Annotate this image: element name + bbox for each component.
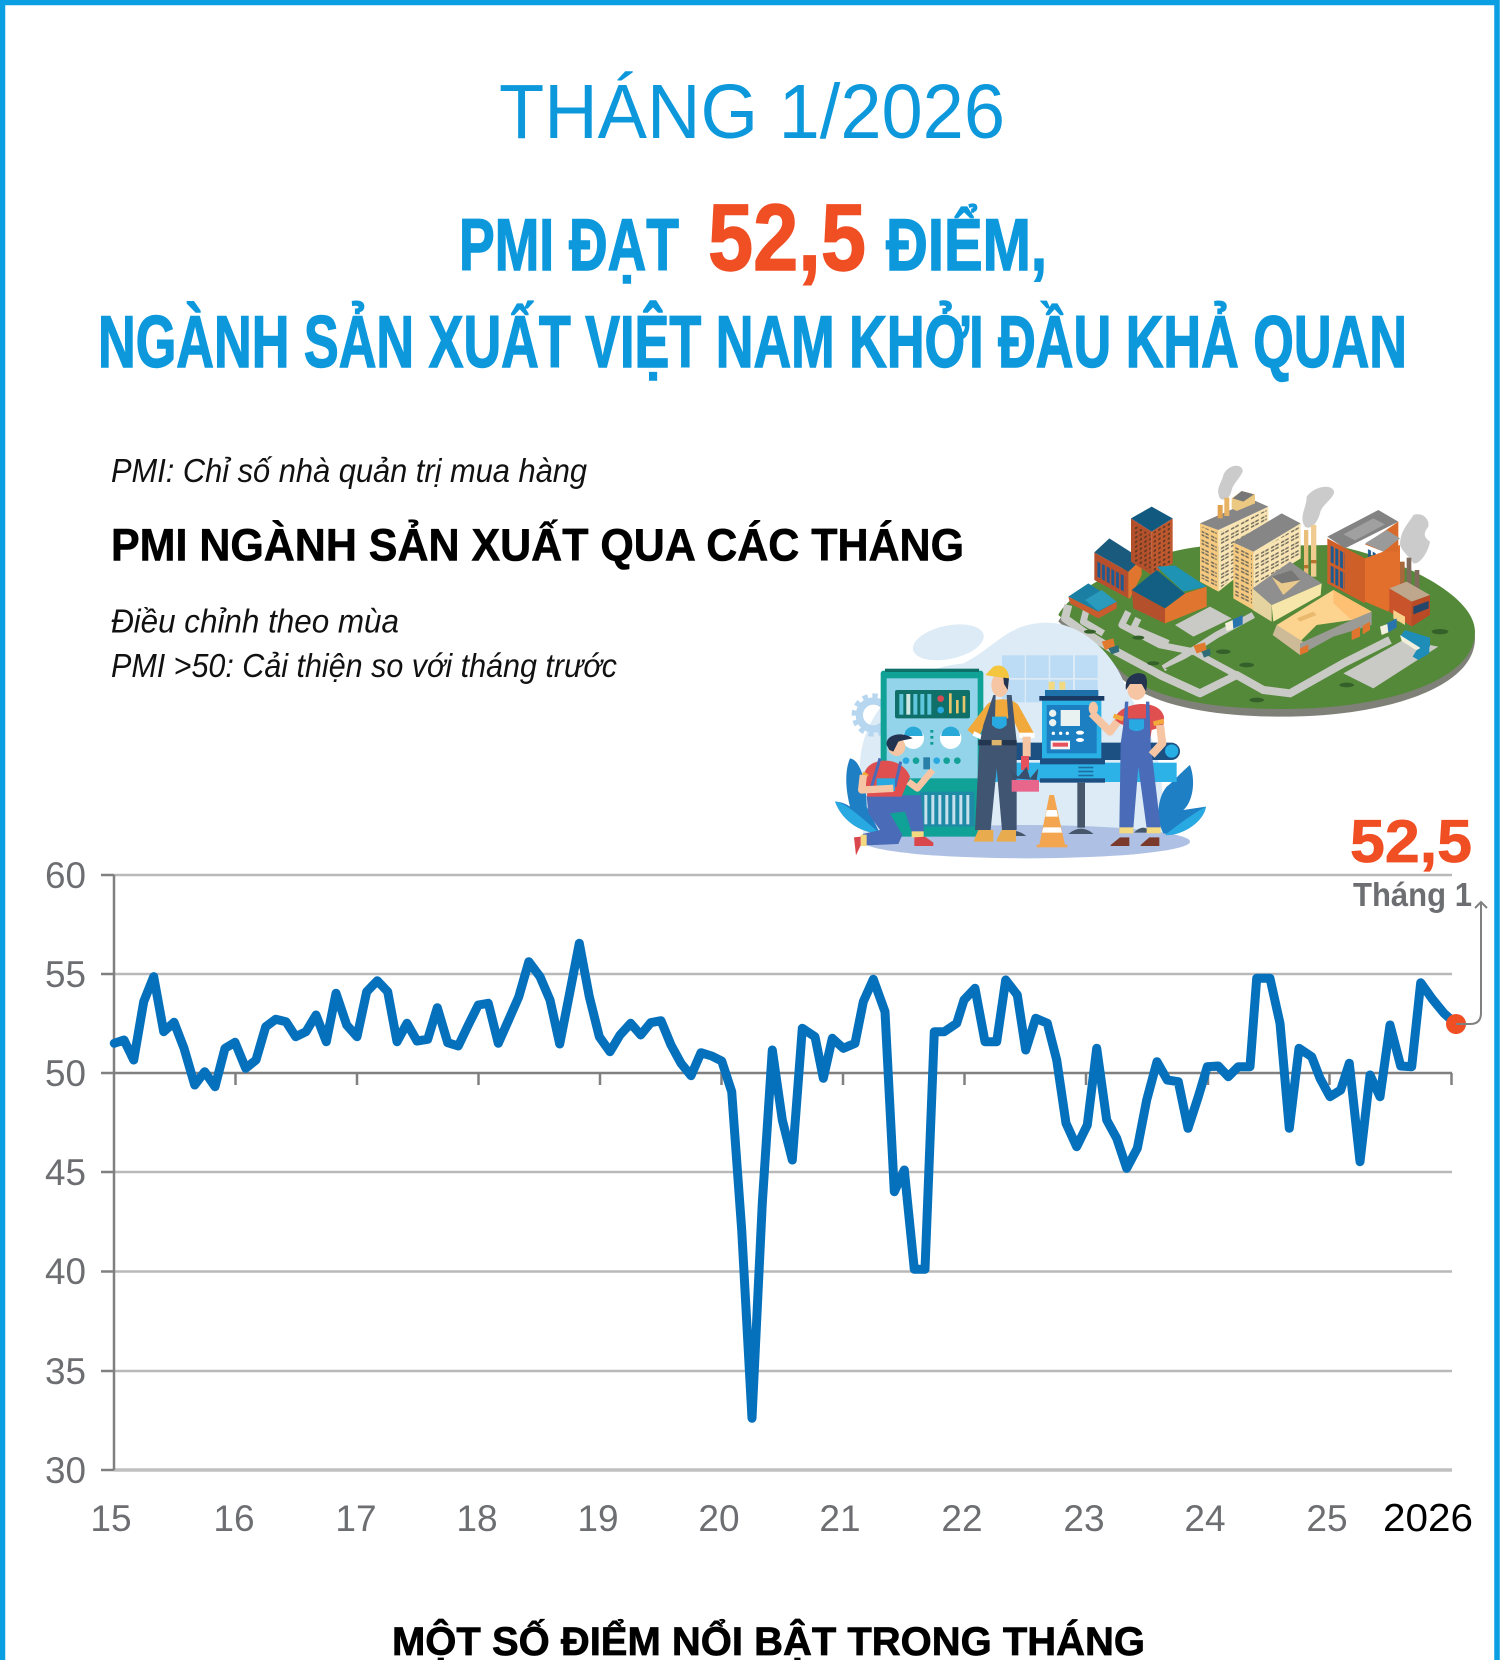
x-axis year labels xyxy=(90,1497,1473,1540)
headline xyxy=(98,185,1407,383)
floor ellipse xyxy=(863,825,1190,858)
large teal-roof hall xyxy=(1157,566,1207,592)
left brick block xyxy=(1094,552,1128,598)
y-axis labels: 40 xyxy=(45,1251,86,1292)
latest value marker xyxy=(1446,1014,1466,1034)
y-axis labels: 45 xyxy=(45,1152,86,1193)
roads xyxy=(1065,605,1390,693)
illustration: industrial park island xyxy=(1058,466,1475,717)
conveyor and stand xyxy=(990,743,1180,836)
x-axis year labels: 19 xyxy=(577,1498,619,1539)
x-axis year labels: 25 xyxy=(1306,1498,1348,1539)
console xyxy=(1039,682,1105,776)
x-axis year labels: 21 xyxy=(819,1498,861,1539)
road-side trees xyxy=(1084,629,1448,702)
main yellow hall xyxy=(1277,590,1372,642)
left leaves xyxy=(835,758,880,833)
grid lines xyxy=(114,875,1452,1470)
x-axis year labels: 15 xyxy=(90,1498,132,1539)
y-axis labels: 30 xyxy=(45,1450,86,1491)
x-axis year labels: 2026 xyxy=(1383,1497,1473,1540)
right leaves xyxy=(1159,765,1206,835)
callout arrow xyxy=(1456,902,1487,1024)
tall brick tower xyxy=(1131,518,1152,575)
x-axis year labels: 22 xyxy=(941,1498,983,1539)
x-axis year labels: 16 xyxy=(213,1498,255,1539)
x-axis year labels: 20 xyxy=(698,1498,740,1539)
worker right, waving xyxy=(1089,673,1164,846)
title: month: THÁNG 1/2026 xyxy=(499,69,1005,155)
y-axis labels: 55 xyxy=(45,954,86,995)
x-axis year labels: 18 xyxy=(456,1498,498,1539)
small teal halls xyxy=(1068,597,1117,618)
PMI definition note: PMI: Chỉ số nhà quản trị mua hàng xyxy=(111,452,588,489)
chart heading: PMI NGÀNH SẢN XUẤT QUA CÁC THÁNG xyxy=(111,520,964,570)
red small factory with stacks xyxy=(1400,562,1405,592)
gear icon xyxy=(854,696,893,734)
window panes xyxy=(1002,655,1098,702)
y-axis labels: 60 xyxy=(45,855,86,896)
headline: điểm: ĐIỂM, xyxy=(886,205,1047,286)
illustration: three workers at a control panel xyxy=(835,619,1206,858)
y-axis labels: 35 xyxy=(45,1351,86,1392)
twin smokestacks xyxy=(1304,530,1308,582)
x-axis year labels: 17 xyxy=(335,1498,377,1539)
axes and ticks xyxy=(101,875,1452,1470)
chart note: above 50: PMI >50: Cải thiện so với tháng trước xyxy=(111,647,617,684)
chart note: seasonally adjusted: Điều chỉnh theo mùa xyxy=(111,602,399,640)
y-axis labels: 50 xyxy=(45,1053,86,1094)
yellow tower rear xyxy=(1200,523,1218,592)
headline: PMI đạt: PMI ĐẠT xyxy=(459,205,679,286)
boiler house xyxy=(1253,588,1272,622)
line chart: PMI 2015–2026 xyxy=(45,808,1487,1540)
headline: value 52,5: 52,5 xyxy=(708,185,866,291)
smoke plumes xyxy=(1218,466,1430,563)
worker left, kneeling xyxy=(854,734,933,855)
background blobs xyxy=(910,619,987,666)
callout month: Tháng 1 xyxy=(1353,876,1472,913)
callout value: 52,5 xyxy=(1350,808,1472,875)
trucks xyxy=(1102,615,1430,660)
worker center, with helmet xyxy=(967,665,1039,842)
yellow tower front xyxy=(1233,542,1253,610)
x-axis year labels: 24 xyxy=(1184,1498,1226,1539)
y-axis labels xyxy=(45,855,86,1491)
x-axis year labels: 23 xyxy=(1063,1498,1105,1539)
teal control panel xyxy=(881,669,983,837)
PMI data line xyxy=(114,943,1456,1418)
traffic cone xyxy=(1037,795,1067,847)
right blue-glass building xyxy=(1327,538,1365,603)
